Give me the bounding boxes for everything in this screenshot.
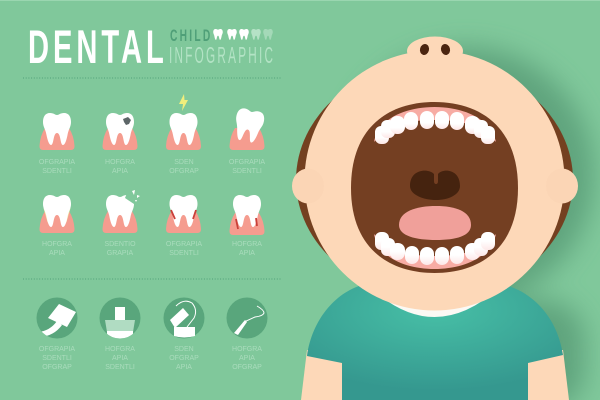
subheading: CHILD: CHILD <box>170 27 210 45</box>
upper gum <box>374 107 496 142</box>
tooth 6 chipped: GRAPIA <box>107 250 134 257</box>
icon: dental probe: APIA <box>239 355 255 362</box>
icon: mouthwash: APIA <box>112 355 128 362</box>
tongue <box>399 206 471 240</box>
tooth 5 yellow roots: APIA <box>49 250 65 257</box>
panel: dental care tools <box>36 298 268 371</box>
tooth 8 receding gum: APIA <box>239 250 255 257</box>
tooth 3 with pain bolt: OFGRAP <box>169 168 199 175</box>
ears <box>292 168 578 204</box>
drop shadow <box>338 47 594 400</box>
lower gum <box>374 234 496 269</box>
tooth 5 yellow roots <box>40 195 74 257</box>
icon: toothbrush: SDENTLI <box>42 355 72 362</box>
icon: toothbrush <box>36 298 78 371</box>
tooth 1 healthy <box>39 113 75 175</box>
mouth <box>351 102 518 273</box>
icon: dental floss <box>164 298 204 371</box>
tooth 3 with pain bolt <box>166 94 201 175</box>
title block <box>28 22 273 74</box>
rating teeth <box>213 29 273 40</box>
subheading: INFOGRAPHIC: INFOGRAPHIC <box>169 41 273 68</box>
tooth 3 with pain bolt: SDEN <box>174 159 194 166</box>
tooth 7 bleeding gum <box>166 195 202 257</box>
panel: tooth conditions row 1 <box>39 94 266 175</box>
tooth 2 with cavity <box>102 113 138 175</box>
icon: dental floss: OFGRAP <box>169 355 199 362</box>
icon: mouthwash <box>100 298 140 371</box>
icon: dental floss: APIA <box>176 364 192 371</box>
shirt collar <box>371 280 499 317</box>
head <box>304 50 564 310</box>
tooth 4 tilted <box>229 107 266 175</box>
tooth 8 receding gum: HOFGRA <box>232 241 262 248</box>
lower teeth <box>375 232 495 265</box>
tooth 2 with cavity: APIA <box>112 168 128 175</box>
t-shirt <box>307 285 563 400</box>
heading: DENTAL: DENTAL <box>28 22 164 74</box>
tooth 4 tilted: SDENTLI <box>232 168 262 175</box>
tooth 1 healthy: OFGRAPIA <box>39 159 75 166</box>
icon: dental probe <box>226 298 268 371</box>
icon: toothbrush: OFGRAPIA <box>39 346 75 353</box>
throat <box>410 171 460 200</box>
character: child with open mouth <box>292 36 594 400</box>
tooth 7 bleeding gum: OFGRAPIA <box>166 241 202 248</box>
tooth 1 healthy: SDENTLI <box>42 168 72 175</box>
tooth 2 with cavity: HOFGRA <box>105 159 135 166</box>
arms <box>301 350 569 400</box>
tooth 5 yellow roots: HOFGRA <box>42 241 72 248</box>
icon: dental floss: SDEN <box>174 346 194 353</box>
tooth 4 tilted: OFGRAPIA <box>229 159 265 166</box>
tooth 7 bleeding gum: SDENTLI <box>169 250 199 257</box>
upper teeth <box>375 111 495 144</box>
tooth 8 receding gum <box>230 195 264 257</box>
icon: dental probe: HOFGRA <box>232 346 262 353</box>
tooth 6 chipped: SDENTIO <box>104 241 136 248</box>
icon: dental probe: OFGRAP <box>232 364 262 371</box>
icon: mouthwash: HOFGRA <box>105 346 135 353</box>
tooth 6 chipped <box>102 190 140 257</box>
nose <box>407 36 463 66</box>
icon: toothbrush: OFGRAP <box>42 364 72 371</box>
icon: mouthwash: SDENTLI <box>105 364 135 371</box>
panel: tooth conditions row 2 <box>40 190 264 257</box>
hair <box>296 62 573 298</box>
